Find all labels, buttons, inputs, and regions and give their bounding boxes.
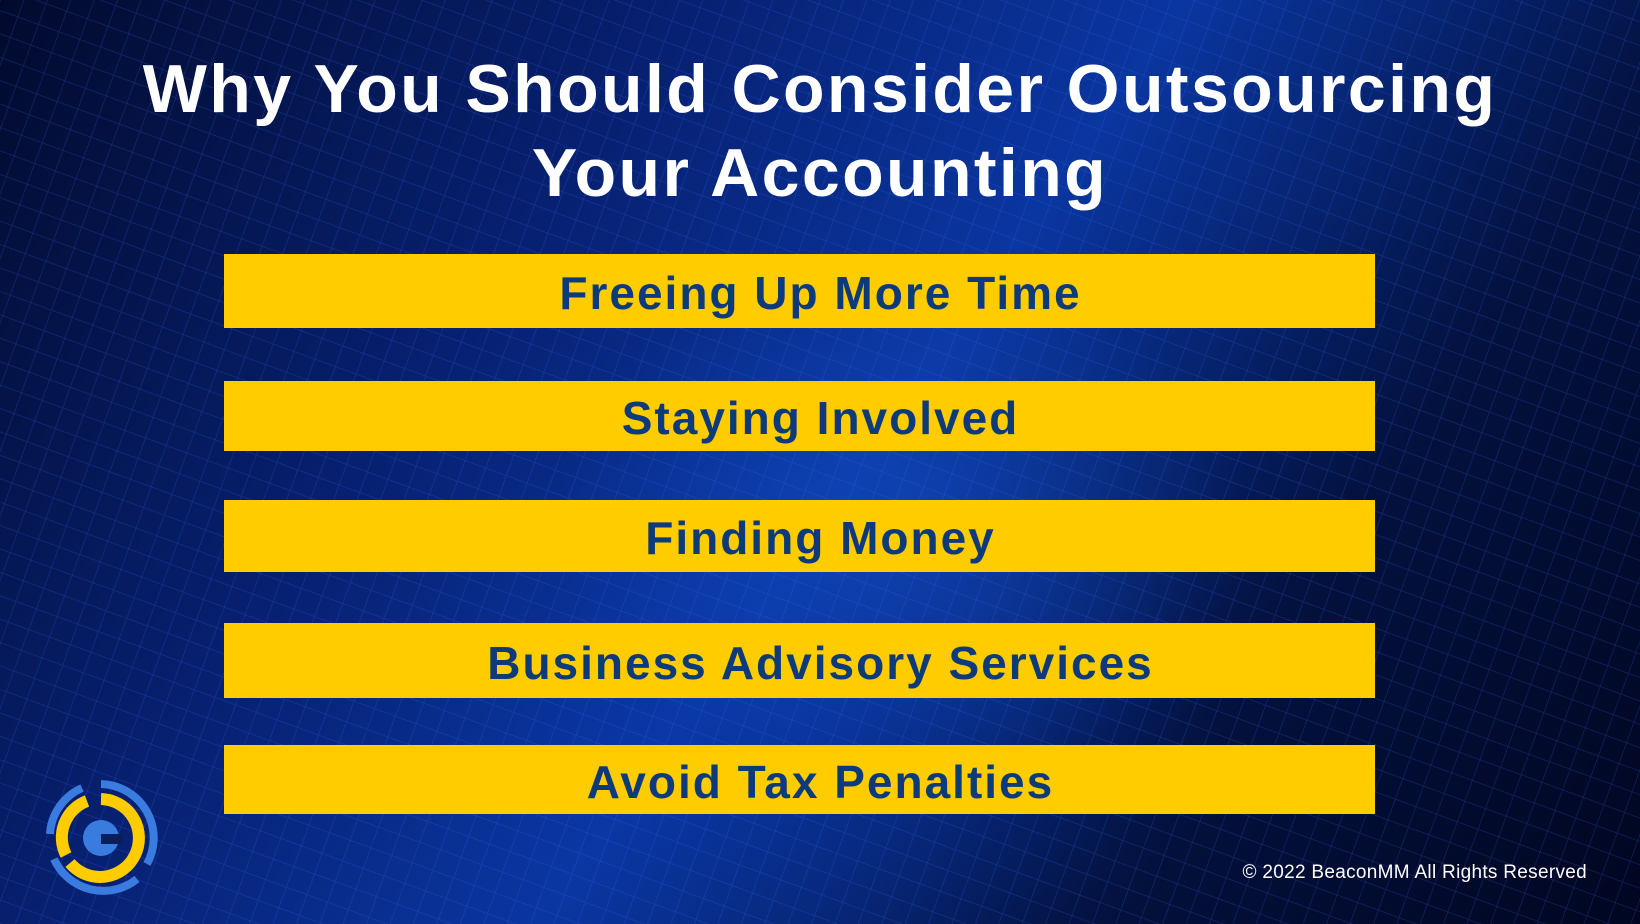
title: Why You Should Consider Outsourcing [143, 51, 1497, 127]
bar: staying involved [224, 381, 1375, 451]
bar: freeing up more time: Freeing Up More Time [559, 267, 1082, 319]
icon: logo [46, 780, 158, 895]
bar: avoid tax penalties [224, 745, 1375, 814]
bar: business advisory services: Business Advisory Services [487, 636, 1154, 688]
bar: finding money [224, 500, 1375, 572]
bar: freeing up more time [224, 254, 1375, 328]
copyright: © 2022 BeaconMM All Rights Reserved [1242, 862, 1587, 883]
bar: business advisory services [224, 623, 1375, 698]
title: Your Accounting [532, 135, 1108, 211]
bar: staying involved: Staying Involved [622, 392, 1019, 444]
title [142, 51, 1497, 211]
bar: finding money: Finding Money [645, 512, 996, 564]
bar: avoid tax penalties: Avoid Tax Penalties [587, 756, 1054, 808]
